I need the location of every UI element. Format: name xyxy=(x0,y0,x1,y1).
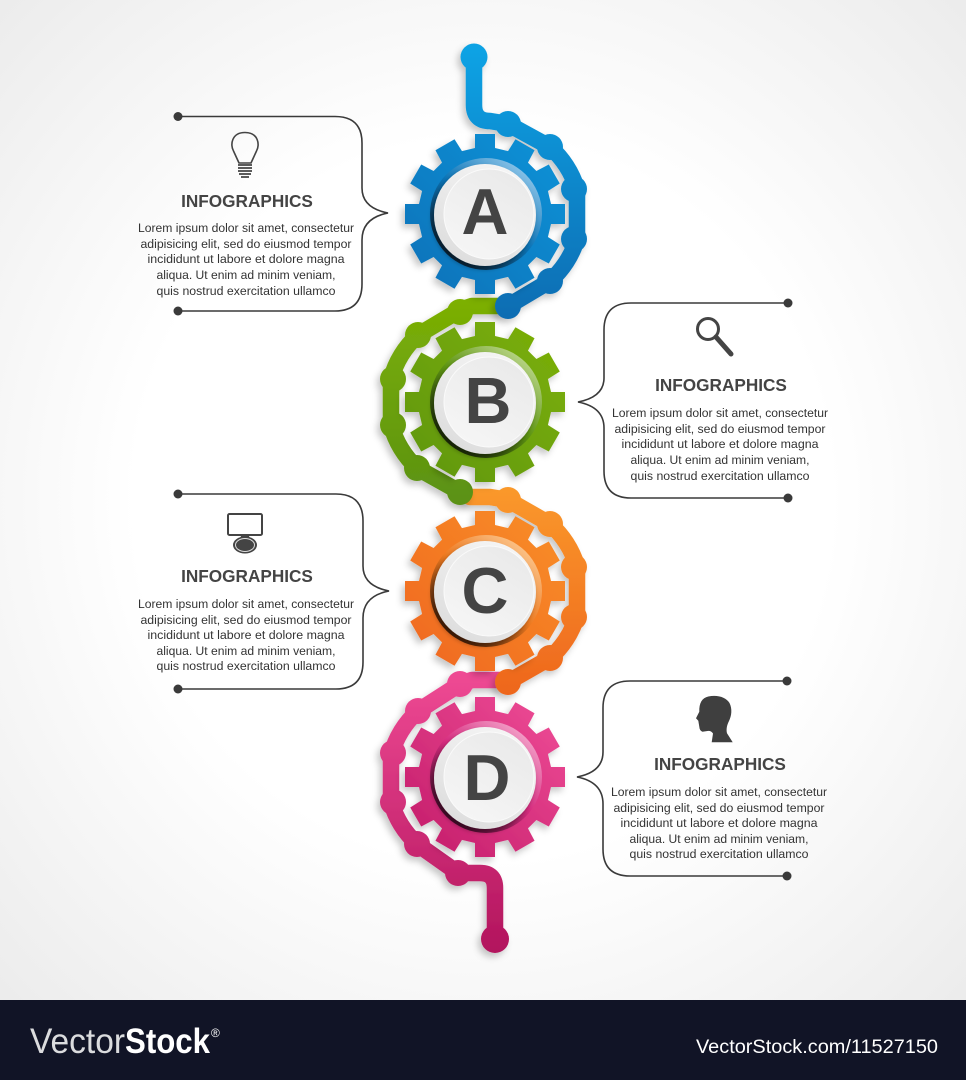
chain A xyxy=(460,44,587,319)
image id: VectorStock.com/11527150 xyxy=(696,1036,938,1058)
text block xyxy=(612,406,828,483)
chain C xyxy=(470,487,587,695)
panel: callout B xyxy=(578,298,828,502)
text block: adipisicing elit, sed do eiusmod tempor xyxy=(614,801,824,815)
text block: aliqua. Ut enim ad minim veniam, xyxy=(630,832,808,846)
letter A: A xyxy=(462,175,508,248)
icon: light bulb xyxy=(232,132,258,177)
gear B xyxy=(405,322,565,482)
gear D xyxy=(405,697,565,857)
icon: head silhouette xyxy=(696,696,733,742)
icon: magnifier xyxy=(698,318,731,354)
panel: callout A xyxy=(138,112,388,316)
panel: callout D xyxy=(577,676,827,880)
bracket A xyxy=(178,116,388,311)
logo xyxy=(30,1022,220,1061)
bracket D xyxy=(577,681,787,876)
text block xyxy=(138,221,354,298)
text block: adipisicing elit, sed do eiusmod tempor xyxy=(140,237,352,251)
footer band xyxy=(0,1000,966,1080)
text block: adipisicing elit, sed do eiusmod tempor xyxy=(140,613,352,627)
letter C: C xyxy=(462,554,508,627)
chain D xyxy=(380,671,509,953)
text block: incididunt ut labore et dolore magna xyxy=(622,437,819,451)
letter D: D xyxy=(464,741,510,814)
logo: Vector xyxy=(30,1022,125,1061)
text block xyxy=(138,597,354,673)
text block: quis nostrud exercitation ullamco xyxy=(630,469,810,483)
text block: adipisicing elit, sed do eiusmod tempor xyxy=(614,422,826,436)
panel: callout C xyxy=(138,490,389,694)
heading: INFOGRAPHICS xyxy=(655,375,787,395)
gear A xyxy=(405,134,565,294)
icon: monitor xyxy=(228,514,262,554)
heading: INFOGRAPHICS xyxy=(654,754,786,774)
text block: Lorem ipsum dolor sit amet, consectetur xyxy=(138,597,354,611)
text block: quis nostrud exercitation ullamco xyxy=(630,847,809,861)
text block: Lorem ipsum dolor sit amet, consectetur xyxy=(611,785,827,799)
logo: Stock xyxy=(125,1022,210,1061)
chain B xyxy=(380,299,500,505)
letter B: B xyxy=(465,364,511,437)
text block: incididunt ut labore et dolore magna xyxy=(148,252,345,266)
text block xyxy=(611,785,827,861)
logo: ® xyxy=(211,1026,220,1040)
bracket B xyxy=(578,303,788,498)
text block: Lorem ipsum dolor sit amet, consectetur xyxy=(138,221,354,235)
text block: aliqua. Ut enim ad minim veniam, xyxy=(156,644,336,658)
heading: INFOGRAPHICS xyxy=(181,191,313,211)
gear C xyxy=(405,511,565,671)
text block: aliqua. Ut enim ad minim veniam, xyxy=(156,268,336,282)
text block: quis nostrud exercitation ullamco xyxy=(156,659,336,673)
heading: INFOGRAPHICS xyxy=(181,566,313,586)
text block: aliqua. Ut enim ad minim veniam, xyxy=(630,453,810,467)
bracket C xyxy=(178,494,389,689)
text block: incididunt ut labore et dolore magna xyxy=(620,816,818,830)
text block: Lorem ipsum dolor sit amet, consectetur xyxy=(612,406,828,420)
text block: quis nostrud exercitation ullamco xyxy=(156,284,336,298)
text block: incididunt ut labore et dolore magna xyxy=(148,628,345,642)
